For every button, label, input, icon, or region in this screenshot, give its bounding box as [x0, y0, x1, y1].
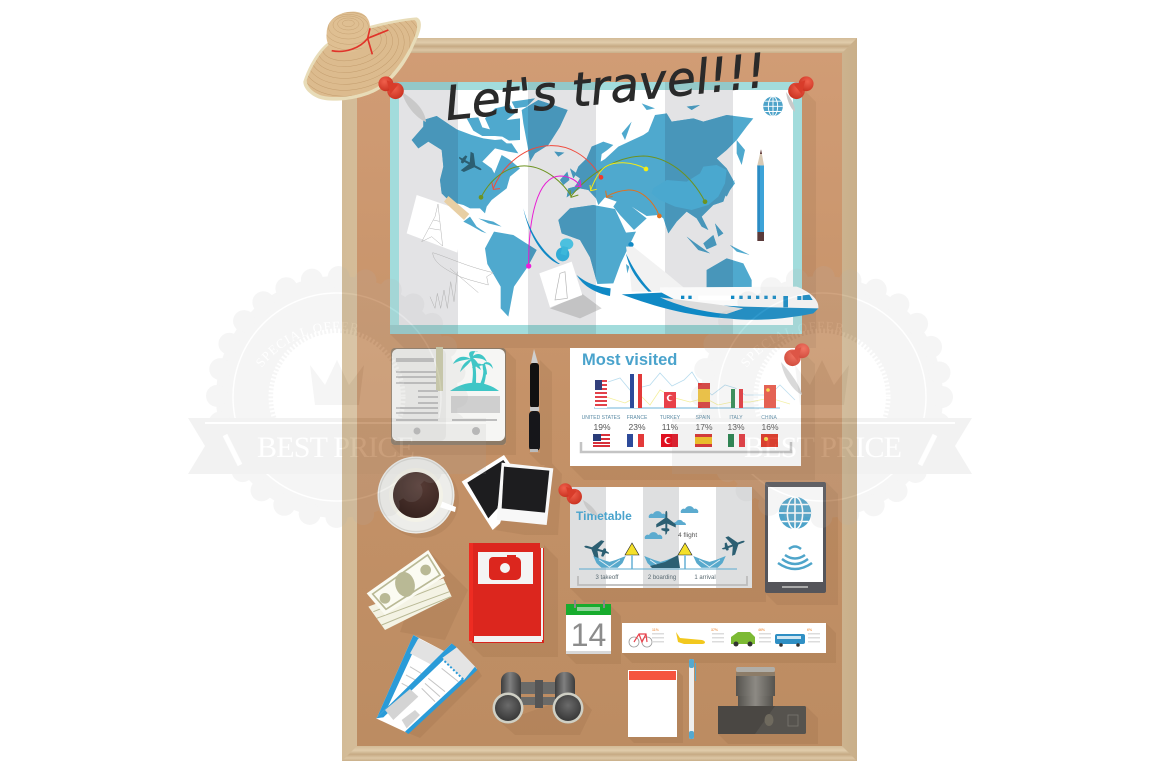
binoculars [492, 672, 584, 724]
flag: United States [593, 434, 610, 447]
strip percentages: 46% [758, 628, 766, 632]
map paper with fold bands [399, 90, 793, 325]
camera [718, 667, 806, 734]
bar: China [764, 385, 776, 408]
pencil sketch of plane [430, 253, 493, 308]
icon: yellow plane [676, 632, 705, 644]
bar: France [630, 374, 642, 408]
icon: flight plane [656, 511, 676, 535]
percentages: 17% [695, 422, 713, 432]
percentages [593, 422, 779, 432]
map border [390, 82, 802, 334]
transport strip [622, 623, 826, 653]
percentages: 19% [593, 422, 611, 432]
polaroid photos [462, 455, 553, 530]
calendar [566, 600, 611, 654]
route end points [479, 167, 707, 269]
push pin: map left [378, 76, 426, 122]
watermark badge: right [672, 266, 972, 528]
country labels [582, 415, 777, 421]
percentages: 13% [727, 422, 745, 432]
clouds [645, 506, 698, 539]
bracket [578, 576, 747, 585]
timetable step labels: 1 arrival [694, 575, 716, 581]
calendar date: 14 [571, 617, 606, 653]
warning sign left [625, 543, 639, 569]
strip percentages [652, 628, 813, 632]
icon: bicycle [629, 634, 652, 647]
boarding passes [376, 635, 477, 734]
blue pencil [757, 149, 764, 241]
bracket [581, 442, 791, 452]
bar: United States [595, 380, 607, 408]
China highlight [652, 165, 727, 210]
watermark text: BEST PRICE [257, 431, 415, 464]
ticket front [376, 643, 477, 734]
icon: takeoff plane [582, 536, 612, 563]
country labels: SPAIN [696, 415, 711, 421]
continents in fold bands [412, 98, 733, 288]
notepad [628, 670, 677, 737]
strip percentages: 37% [711, 628, 719, 632]
panel: timetable [570, 487, 752, 588]
ticket back [377, 635, 445, 718]
country labels: FRANCE [627, 415, 648, 421]
flag: Spain [695, 434, 712, 447]
fountain pen [529, 349, 540, 452]
country labels: TURKEY [660, 415, 681, 421]
icon: globe [779, 497, 811, 529]
icon: palm island [450, 351, 499, 391]
sticky note: Eiffel tower [407, 195, 469, 253]
timetable step labels: 2 boarding [648, 575, 676, 581]
cork surface [357, 53, 842, 746]
line chart [594, 372, 795, 408]
title: Let's travel!!! [443, 44, 768, 132]
bar: Turkey [664, 392, 676, 408]
icon: camera [489, 555, 521, 580]
watermark arc text: SPECIAL OFFER [742, 322, 842, 366]
heading: timetable: Timetable [576, 509, 632, 523]
push pin: map right [786, 76, 814, 112]
smartphone [765, 482, 826, 593]
bar: Italy [731, 389, 743, 408]
terminals [593, 555, 726, 568]
flag: France [627, 434, 644, 447]
heading: most visited: Most visited [582, 351, 677, 369]
icon: green car [731, 632, 755, 646]
wooden frame [342, 38, 857, 761]
coffee cup [378, 456, 456, 534]
white pen [689, 659, 696, 739]
world continents [405, 98, 753, 317]
timetable step labels: 3 takeoff [596, 575, 619, 581]
country labels: CHINA [761, 415, 777, 421]
country labels: UNITED STATES [582, 415, 621, 421]
icon: small plane on map [454, 148, 487, 179]
statue of liberty note with blue pin [539, 238, 602, 318]
country labels: ITALY [729, 415, 743, 421]
banknotes [367, 550, 452, 630]
red photo album [469, 543, 544, 643]
flag: China [761, 434, 778, 447]
icon: straw hat [303, 12, 421, 101]
icon: wifi signal [778, 546, 812, 569]
watermark arc text: SPECIAL OFFER [256, 322, 358, 366]
percentages: 11% [662, 422, 679, 432]
flag: Turkey [661, 434, 678, 447]
panel: most visited [570, 348, 801, 466]
flag: Italy [728, 434, 745, 447]
strip percentages: 6% [807, 628, 813, 632]
photo: back [462, 455, 517, 530]
open notebook [391, 347, 506, 445]
photo: front [497, 463, 553, 525]
icon: blue bus [775, 634, 805, 647]
flight routes [481, 146, 705, 266]
percentages: 16% [761, 422, 779, 432]
push pin: timetable [558, 483, 598, 516]
item shadows [383, 88, 838, 744]
cork board [342, 38, 857, 761]
icon: arrival plane [719, 532, 748, 558]
strip percentages: 11% [652, 628, 660, 632]
flight label: 4 flight [678, 532, 697, 539]
warning sign right [678, 543, 692, 569]
percentages: 23% [628, 422, 646, 432]
watermark text: BEST PRICE [744, 431, 902, 464]
push pin: most visited [781, 343, 810, 395]
wall map [390, 82, 818, 334]
timetable step labels [596, 575, 716, 581]
bar: Spain [698, 383, 710, 408]
airplane with trail [523, 208, 818, 320]
watermark badge: left [188, 266, 486, 528]
icon: globe [763, 97, 783, 116]
strip captions [652, 633, 820, 642]
